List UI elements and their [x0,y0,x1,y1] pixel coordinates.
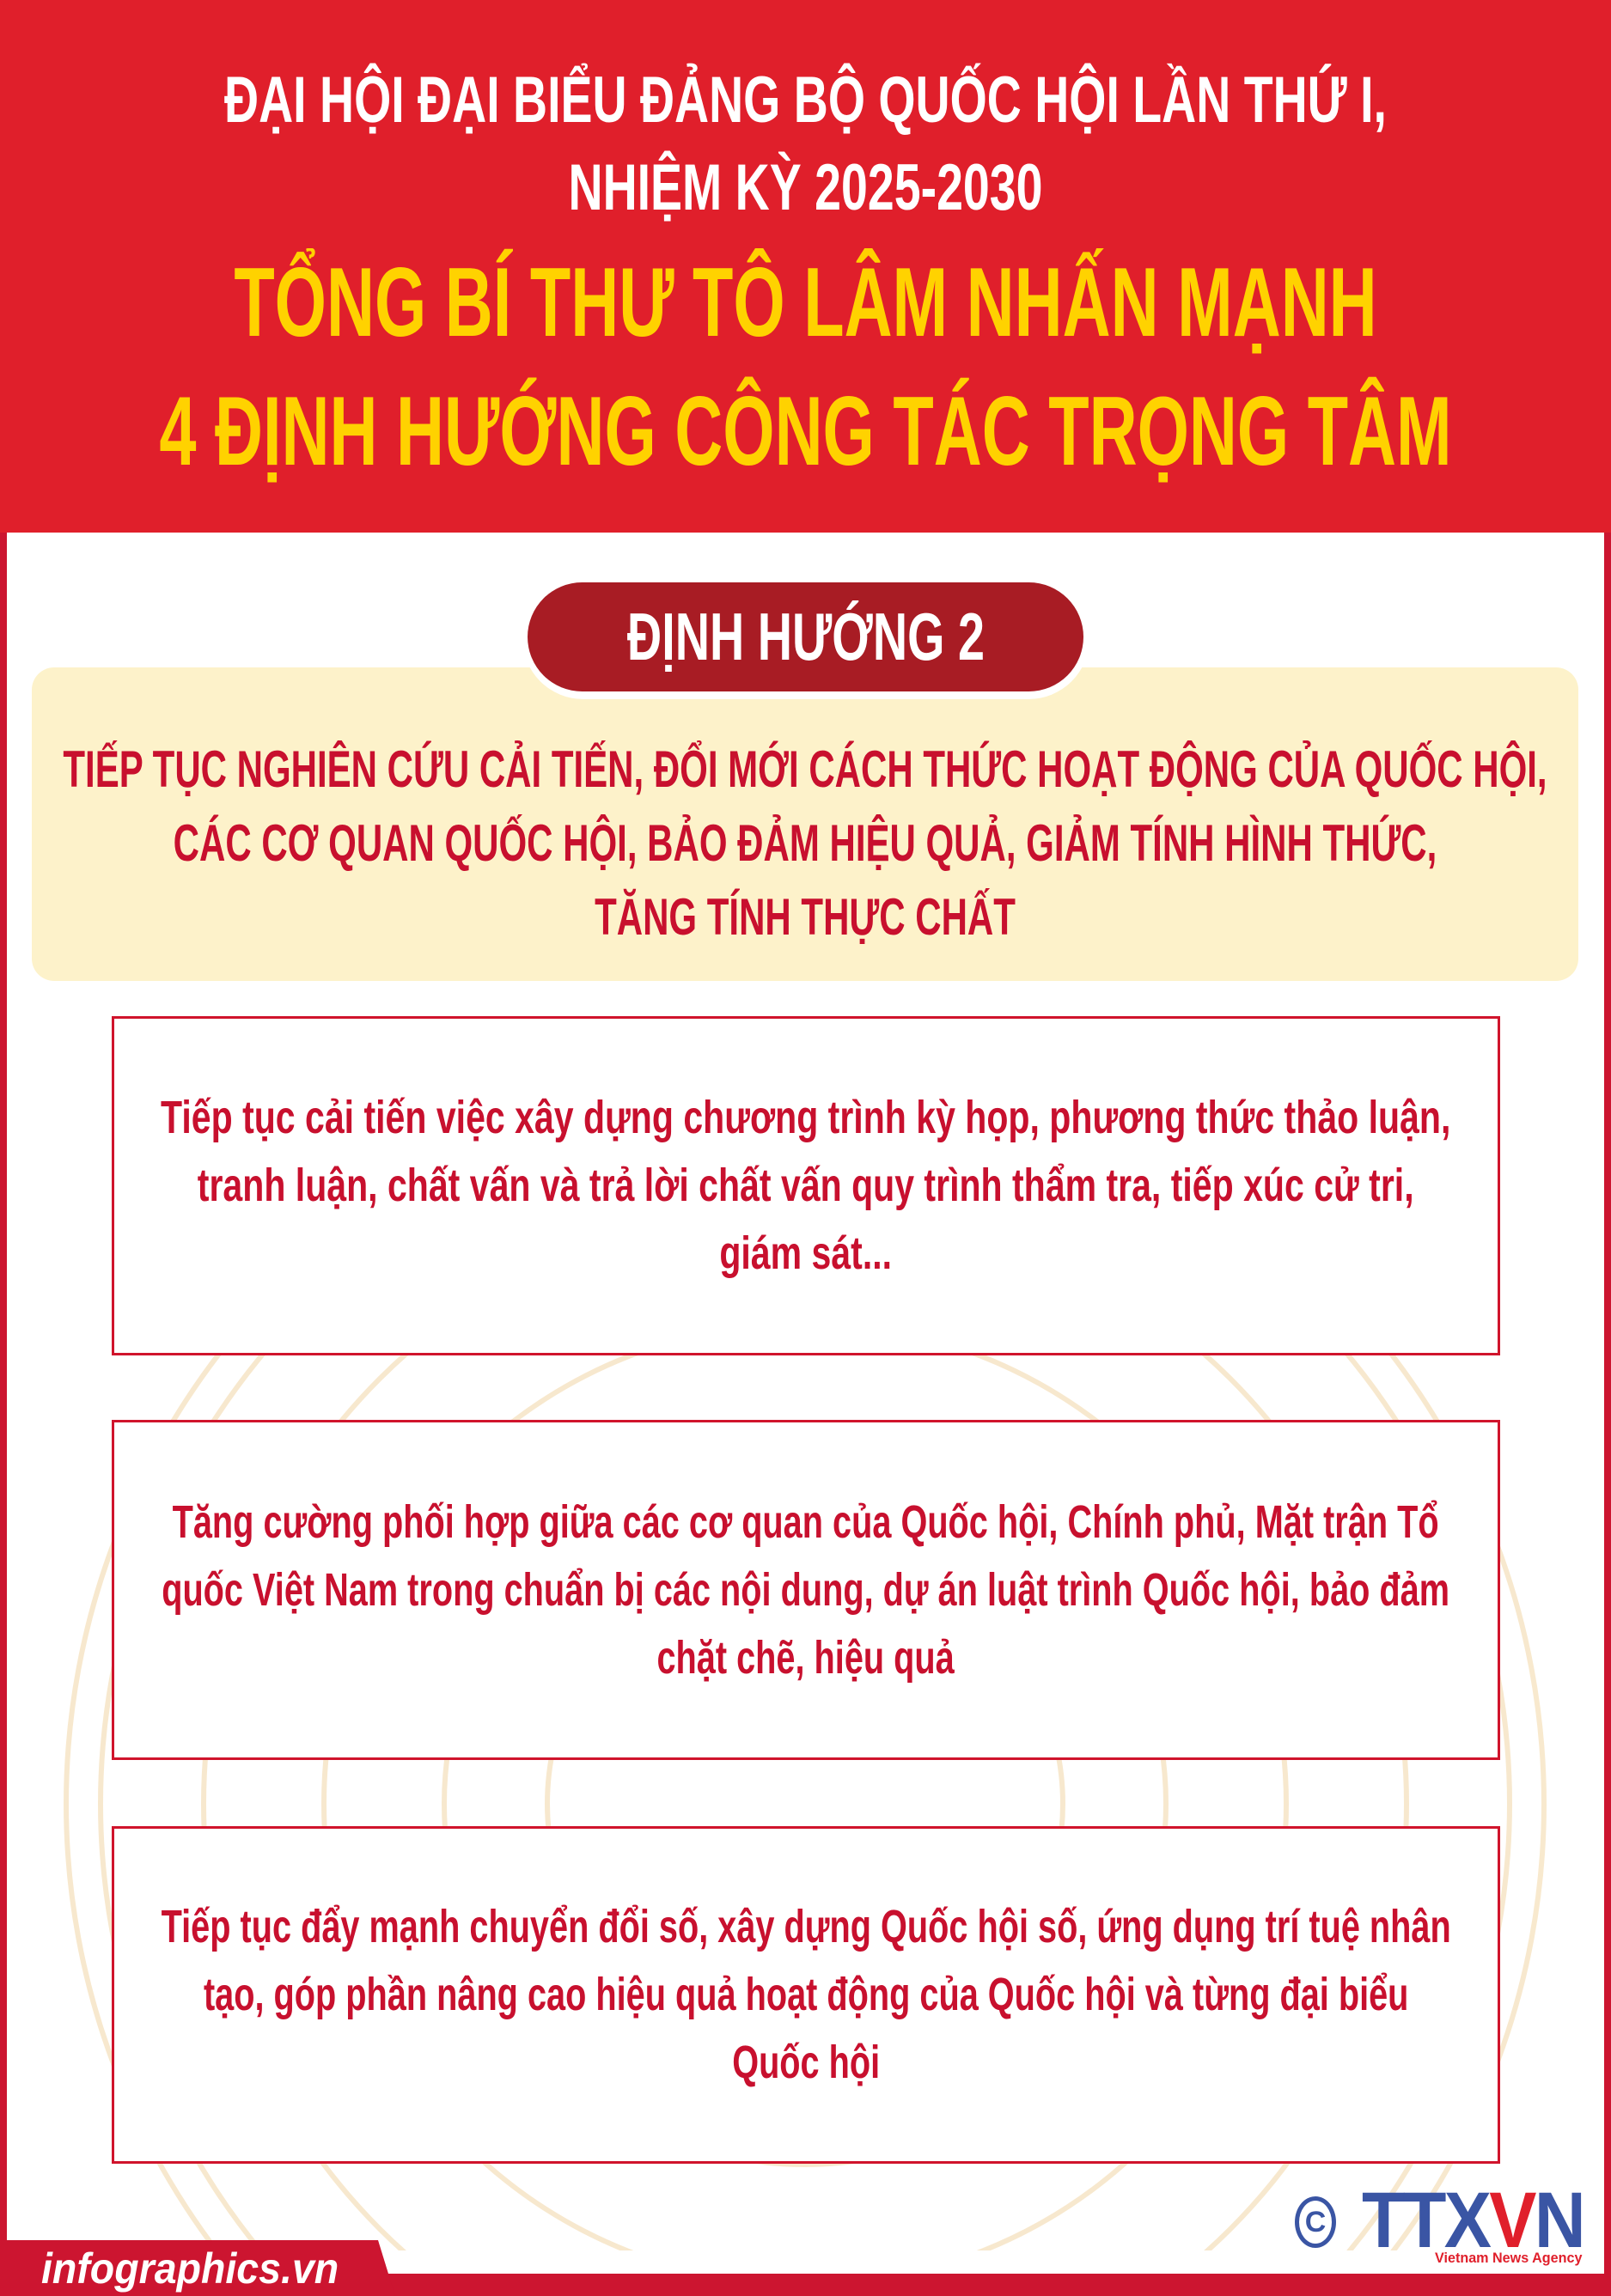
box 1: Tiếp tục cải tiến việc xây dựng chương trình kỳ họp, phương thức thảo luận, [161,1092,1451,1143]
box 2: chặt chẽ, hiệu quả [657,1632,955,1684]
yellow panel [32,667,1578,981]
box 3: tạo, góp phần nâng cao hiệu quả hoạt động của Quốc hội và từng đại biểu [204,1969,1408,2020]
title: white subtitle [224,64,1387,224]
title: yellow main: 4 ĐỊNH HƯỚNG CÔNG TÁC TRỌNG TÂM [159,377,1452,486]
background drum pattern [64,1355,1547,2250]
logo: TTXVN: C [1305,2206,1326,2238]
box 1: tranh luận, chất vấn và trả lời chất vấn quy trình thẩm tra, tiếp xúc cử tri, [198,1160,1414,1211]
box 3 [112,1826,1500,2164]
yellow panel text: TIẾP TỤC NGHIÊN CỨU CẢI TIẾN, ĐỔI MỚI CÁCH THỨC HOẠT ĐỘNG CỦA QUỐC HỘI, [63,740,1547,798]
title: white subtitle: NHIỆM KỲ 2025-2030 [569,151,1042,224]
box 1: giám sát... [720,1227,892,1279]
header [0,0,1611,533]
box 1 [112,1016,1500,1355]
yellow panel text [63,740,1547,946]
footer tab: infographics.vn: infographics.vn [41,2244,339,2293]
yellow panel text: CÁC CƠ QUAN QUỐC HỘI, BẢO ĐẢM HIỆU QUẢ, GIẢM TÍNH HÌNH THỨC, [174,814,1437,872]
box 3: Tiếp tục đẩy mạnh chuyển đổi số, xây dựng Quốc hội số, ứng dụng trí tuệ nhân [161,1901,1451,1952]
pill: Định hướng 2: ĐỊNH HƯỚNG 2 [626,599,985,674]
title: yellow main: TỔNG BÍ THƯ TÔ LÂM NHẤN MẠNH [234,248,1377,357]
logo: TTXVN: Vietnam News Agency [1435,2250,1582,2266]
bottom bar [0,2274,1611,2296]
yellow panel text: TĂNG TÍNH THỰC CHẤT [595,888,1016,946]
box 2 [112,1420,1500,1760]
title: white subtitle: ĐẠI HỘI ĐẠI BIỂU ĐẢNG BỘ QUỐC HỘI LẦN THỨ I, [224,64,1387,137]
box 2: Tăng cường phối hợp giữa các cơ quan của Quốc hội, Chính phủ, Mặt trận Tổ [173,1496,1439,1548]
side borders [0,0,7,2296]
logo: TTXVN: TTXVN [1362,2177,1584,2264]
box 2: quốc Việt Nam trong chuẩn bị các nội dung, dự án luật trình Quốc hội, bảo đảm [162,1563,1449,1615]
pill: Định hướng 2 [522,577,1089,699]
title: yellow main [159,248,1452,486]
box 3: Quốc hội [732,2037,880,2088]
